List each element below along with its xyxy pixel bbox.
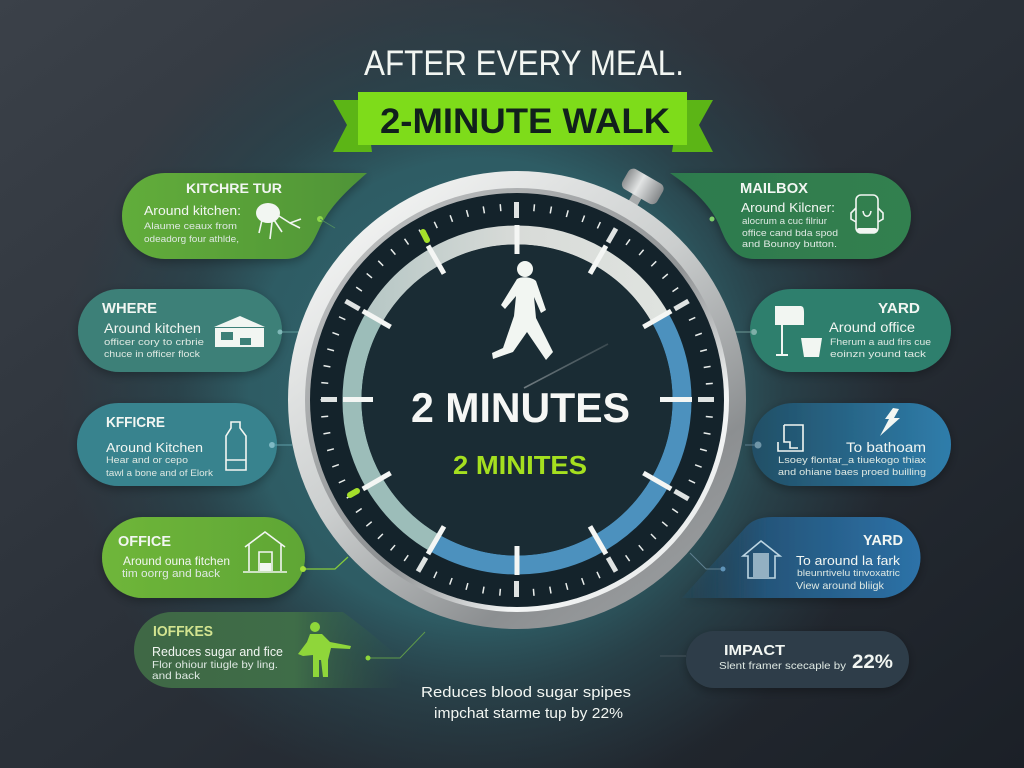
panel: mailbox: and Bounoy button.	[742, 239, 837, 250]
progress ring: light segment	[374, 235, 660, 318]
panel: to bathroom: To bathoam	[846, 440, 926, 455]
icon: lightning bolt	[880, 408, 900, 436]
panel: office: OFFICE	[118, 534, 171, 550]
panel: mailbox: MAILBOX	[740, 181, 808, 197]
outer hour ticks	[321, 202, 714, 597]
panel: where: chuce in officer flock	[104, 349, 200, 360]
green label: 2 minites: 2 MINITES	[453, 450, 587, 480]
title: AFTER EVERY MEAL.	[364, 44, 684, 83]
panel: yard lower: YARD	[863, 533, 903, 549]
panel: office	[102, 517, 348, 598]
panel: yard	[735, 289, 951, 372]
panel: yard lower	[682, 517, 920, 598]
panel: offices	[134, 612, 425, 688]
footer text	[421, 685, 631, 722]
panel: where: Around kitchen	[104, 321, 201, 336]
icon: small house	[743, 541, 780, 578]
panel: mailbox: office cand bda spod	[742, 228, 838, 239]
panel: kitchen tour: odeadorg four athlde,	[144, 234, 239, 245]
panel: where: officer cory to crbrie	[104, 337, 204, 348]
icon: mailbox and bin	[775, 306, 822, 357]
panel: yard: Around office	[829, 320, 915, 335]
panel: yard lower: View around bliigk	[796, 580, 885, 592]
icon: bottle	[226, 422, 246, 470]
big label: 2 minutes: 2 MINUTES	[411, 384, 630, 431]
second hand	[524, 344, 608, 388]
panel: yard lower: bleunrtivelu tinvoxatric	[797, 568, 900, 579]
icon: building	[214, 316, 265, 347]
banner: 2-minute walk: 2-MINUTE WALK	[380, 102, 670, 141]
panel: kitchen tour: Around kitchen:	[144, 203, 241, 218]
panel: kffice	[77, 403, 292, 486]
footer text: Reduces blood sugar spipes	[421, 685, 631, 701]
stopwatch crown	[614, 166, 666, 217]
panel: mailbox	[670, 173, 911, 259]
panel: kffice: tawl a bone and of Elork	[106, 468, 213, 479]
panel: kffice: Hear and or cepo	[106, 455, 188, 466]
icon: person	[298, 622, 351, 677]
panel: where: WHERE	[102, 300, 157, 317]
panel: kitchen tour: KITCHRE TUR	[186, 181, 282, 196]
panel: yard lower: To around la fark	[796, 554, 901, 568]
panel: offices: and back	[152, 670, 201, 682]
panel: kitchen tour: Alaume ceaux from	[144, 221, 237, 232]
hour ticks	[343, 225, 692, 575]
footer text: impchat starme tup by 22%	[434, 706, 623, 722]
icon: kitchen creature	[256, 203, 301, 239]
panel: office: Around ouna fitchen	[123, 554, 230, 568]
panel: kffice: Around Kitchen	[106, 440, 203, 455]
minute ticks	[324, 207, 710, 593]
panel: where	[78, 289, 300, 372]
panel: to bathroom	[745, 403, 951, 486]
panel: yard: YARD	[878, 300, 920, 317]
panel: impact: Slent framer scecaple by	[719, 660, 847, 672]
panel: offices: Reduces sugar and fice	[152, 644, 283, 659]
banner: 2-minute walk	[333, 92, 713, 152]
panel: impact: 22%	[852, 652, 893, 673]
panel: offices: IOFFKES	[153, 624, 213, 640]
icon: walking person	[492, 261, 553, 360]
green markers	[350, 232, 427, 495]
icon: phone	[851, 195, 883, 233]
panel: yard: Fherum a aud firs cue	[830, 337, 931, 348]
panel: impact	[660, 631, 909, 688]
icon: house	[243, 532, 287, 572]
panel: offices: Flor ohiour tiugle by ling.	[152, 659, 278, 671]
panel: office: tim oorrg and back	[122, 568, 221, 580]
progress ring: pale teal segment	[352, 318, 434, 543]
progress ring: blue segment	[434, 318, 682, 565]
panel: mailbox: alocrum a cuc filriur	[742, 216, 827, 227]
panel: impact: IMPACT	[724, 642, 785, 659]
stopwatch dial	[288, 171, 746, 629]
panel: to bathroom: and ohiane baes proed builling	[778, 467, 926, 478]
panel: kitchen tour	[122, 173, 367, 259]
panel: kffice: KFFICRE	[106, 414, 165, 431]
panel: mailbox: Around Kilcner:	[741, 200, 835, 215]
icon: appliance	[778, 425, 803, 451]
panel: to bathroom: Lsoey flontar_a tiuekogo thiax	[778, 455, 926, 466]
panel: yard: eoinzn yound tack	[830, 349, 926, 360]
